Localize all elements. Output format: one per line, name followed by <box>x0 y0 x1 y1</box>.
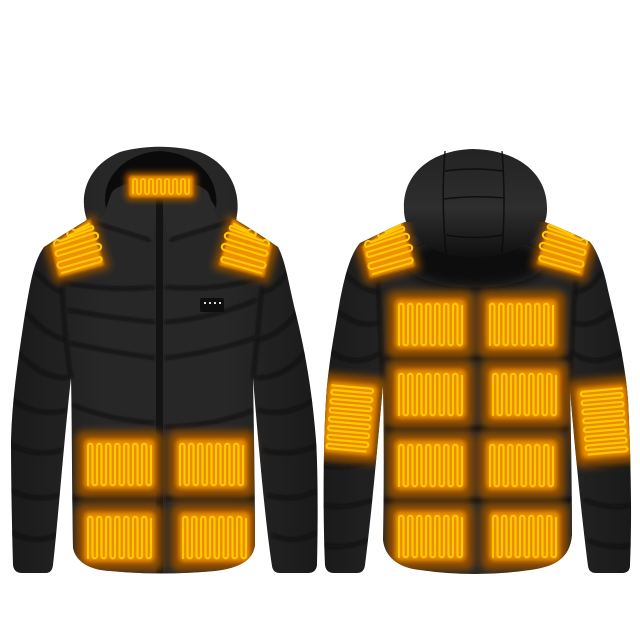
infographic: heated jacket front and back views <box>11 146 632 574</box>
front collar <box>96 180 224 240</box>
front jacket <box>10 147 318 574</box>
heating pad: back row 4 left <box>387 503 474 570</box>
back jacket <box>313 149 640 574</box>
front hood edge shadow <box>87 220 236 240</box>
heating pad: front lower left bottom <box>76 504 163 571</box>
heating pads: front, clipped to jacket <box>44 172 279 571</box>
heating pad: back row 2 right <box>481 361 568 428</box>
heating pad: front lower right upper <box>168 431 255 498</box>
heating pad: front right shoulder <box>213 214 279 283</box>
heating pad: back left sleeve <box>313 372 387 465</box>
back jacket silhouette <box>324 222 631 574</box>
back hood <box>404 149 547 257</box>
heating pad: back row 3 right <box>478 432 565 499</box>
back sleeve seams <box>322 272 632 547</box>
heating pad: back row 2 left <box>387 361 474 428</box>
heating pad: back right shoulder <box>531 213 597 282</box>
heating pad: front lower right bottom <box>171 504 258 571</box>
heating pad: front collar <box>125 172 197 201</box>
heating pad: back right sleeve <box>567 375 640 468</box>
control panel <box>200 298 224 312</box>
heating pad: back row 1 right <box>478 291 565 358</box>
shadow under back hood <box>405 236 545 288</box>
heating pad: front lower left upper <box>76 431 163 498</box>
heating pad: back left shoulder <box>355 215 421 284</box>
heating pads: back, clipped to jacket <box>313 213 640 570</box>
heating pad: back row 3 left <box>387 432 474 499</box>
front hood interior <box>105 151 216 208</box>
front zipper <box>156 197 163 573</box>
heating pad: back row 4 right <box>481 503 568 570</box>
heating pad: front left shoulder <box>44 214 110 283</box>
heating pad: back row 1 left <box>387 291 474 358</box>
front sleeve and body seams <box>10 272 318 539</box>
front jacket silhouette <box>11 147 318 574</box>
